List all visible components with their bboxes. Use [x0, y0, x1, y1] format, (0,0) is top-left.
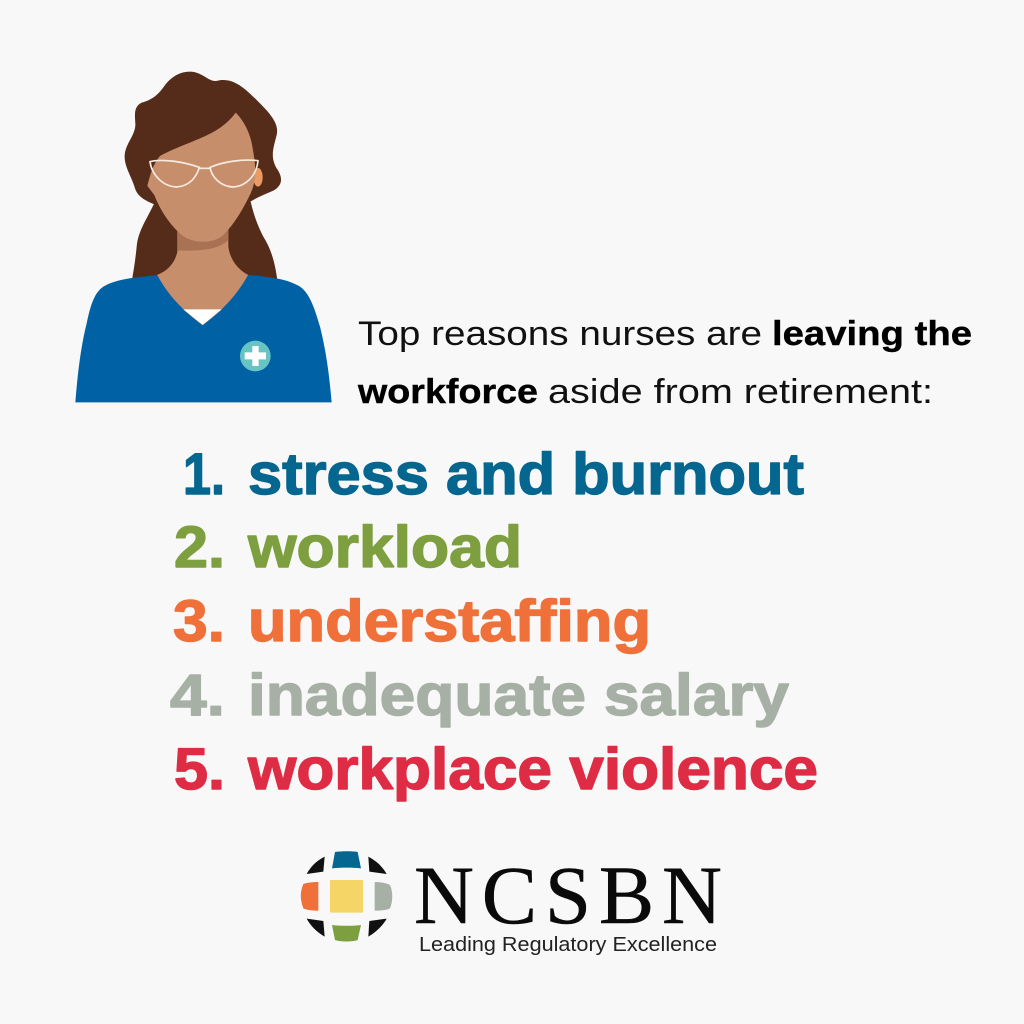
nurse face: [147, 113, 255, 242]
nurse hair top: [125, 72, 281, 205]
list item 4: 4.: [170, 663, 225, 728]
list item 1: stress and burnout: [248, 442, 804, 507]
list item 5: 5.: [174, 737, 225, 802]
icon: badge with plus: [240, 341, 271, 371]
list item 2: 2.: [174, 515, 225, 580]
list item 5: workplace violence: [247, 737, 818, 802]
intro text: aside from retirement:: [548, 373, 933, 411]
list item 3: 3.: [173, 589, 225, 654]
nurse undershirt: [183, 309, 222, 325]
icon: logo globe: [301, 851, 392, 941]
nurse scrub top: [75, 275, 332, 402]
intro text: [357, 315, 972, 411]
intro text: workforce: [357, 373, 538, 411]
list item 4: inadequate salary: [248, 663, 789, 728]
nurse hair back: [132, 202, 277, 280]
list item 1: 1.: [183, 442, 225, 507]
nurse neck shadow: [177, 227, 228, 251]
list item 3: understaffing: [248, 589, 651, 654]
icon: nurse illustration: [75, 72, 332, 402]
nurse glasses: [150, 160, 258, 187]
intro text: leaving the: [772, 315, 972, 353]
nurse ear: [253, 168, 263, 187]
logo tagline: Leading Regulatory Excellence: [419, 934, 717, 956]
nurse neck: [157, 227, 248, 325]
logo wordmark: NCSBN: [414, 849, 722, 941]
intro text: Top reasons nurses are: [358, 315, 762, 353]
list item 2: workload: [247, 515, 522, 580]
logo: NCSBN: [301, 849, 722, 956]
